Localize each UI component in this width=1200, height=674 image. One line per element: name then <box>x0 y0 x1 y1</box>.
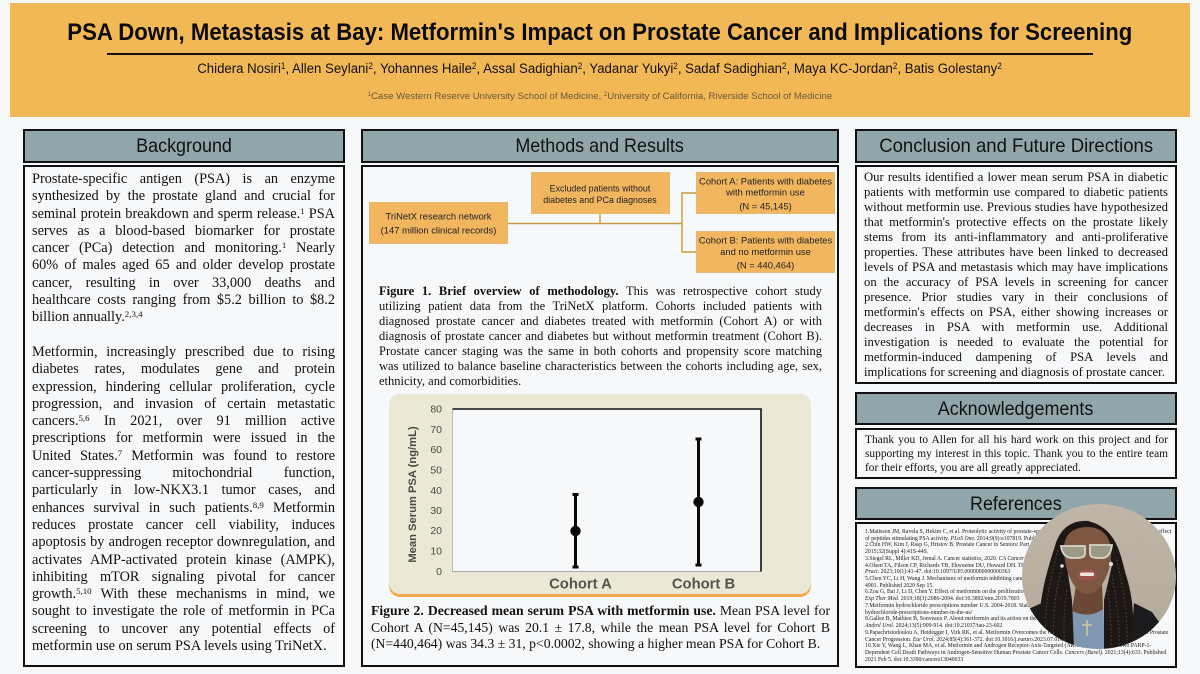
y axis ticks: 40 <box>430 485 442 497</box>
x axis labels: Cohort A <box>549 576 612 592</box>
box: exclusion: Excluded patients without <box>550 184 651 194</box>
reference list: 5.Chen YC, Li H, Wang J. Mechanisms of metformin inhibiting cancer invasion and migration. Am J Transl Res. 2020;12(9):4885- <box>865 576 1166 582</box>
y axis ticks <box>430 404 442 578</box>
box: cohort A: with metformin use <box>725 186 805 198</box>
panel: references <box>855 522 1177 668</box>
box: cohort B: (N = 440,464) <box>737 260 794 270</box>
conclusion text: decreases in PSA with metformin use. Additional <box>864 320 1168 334</box>
heading: Acknowledgements: Acknowledgements <box>938 398 1094 420</box>
reference list: Androl Urol. 2024;13(5):909-914. doi:10.21037/tau-23-602 <box>865 623 1002 629</box>
heading: References: References <box>970 493 1062 515</box>
acknowledgements text: Thank you to Allen for all his hard work on this project and for <box>865 434 1168 446</box>
y axis ticks: 80 <box>430 404 442 416</box>
reference list: 4.Olsen TA, Filson CP, Richards TB, Ekwueme DU, Howard DH. The Cost of Cancer Care Delivery. JCO Oncol <box>865 563 1125 569</box>
reference list: 2.Chin HW, Kim J, Rasp G, Hristov B. Prostate Cancer in Seniors: Part 1: Epidemiology, Pathology, and Screening. Fed Pract. <box>865 542 1158 548</box>
caption: figure 1: was utilized to balance baseline characteristics between the cohorts including age, sex, <box>379 359 822 373</box>
caption: figure 1: diagnosis of prostate cancer and diabetes but without metformin treatment (Cohort B). <box>379 329 822 343</box>
reference list <box>864 528 1172 663</box>
box: cohort A <box>696 172 834 214</box>
caption: figure 1: Figure 1. Brief overview of methodology. This was retrospective cohort study <box>379 284 822 298</box>
plot area <box>452 409 761 572</box>
paragraph: metformin overview: screening to uncover any potential effects of <box>32 621 335 637</box>
box: cohort A: Cohort A: Patients with diabetes <box>699 176 832 186</box>
heading: Conclusion and Future Directions <box>855 129 1177 163</box>
paragraph: PSA overview: serves as a blood-based biomarker for prostate <box>32 223 335 239</box>
paragraph: metformin overview: growth.5,10 With these mechanisms in mind, we <box>32 586 335 602</box>
reference list: 10.Xie Y, Wang L, Khan MA, et al. Metformin and Androgen Receptor-Axis-Targeted (ARAT) Agents Induce Two PARP-1- <box>865 643 1151 649</box>
conclusion text: patients with metformin use compared to diabetic patients <box>864 185 1168 199</box>
box: cohort A: (N = 45,145) <box>739 200 792 212</box>
y axis ticks: 70 <box>430 424 442 436</box>
necklace cross <box>1082 620 1092 636</box>
paragraph: PSA overview: cancer, resulting in over 33,000 deaths and <box>32 275 335 291</box>
affiliations: 1Case Western Reserve University School of Medicine, 2University of California, Riverside School of Medicine <box>368 91 832 102</box>
conclusion text: metformin's effects on PSA, either showing increases or <box>864 305 1168 319</box>
header banner <box>10 3 1190 117</box>
conclusion text <box>864 170 1168 379</box>
paragraph: metformin overview: prescriptions for metformin were issued in the <box>32 430 335 446</box>
conclusion text: stems from its anti-inflammatory and anti-proliferative <box>864 230 1168 244</box>
neck <box>1072 585 1103 615</box>
jacket <box>1030 603 1159 644</box>
box: cohort B: Cohort B: Patients with diabetes <box>699 234 833 246</box>
paragraph: metformin overview: enhances survival in such patients.8,9 Metformin <box>32 500 335 516</box>
paragraph: metformin overview: reduces prostate cancer cell viability, induces <box>32 517 335 533</box>
presenter portrait <box>1022 504 1176 649</box>
paragraph: PSA overview: cancer (PCa) detection and monitoring.1 Nearly <box>32 240 335 256</box>
box: TriNetX: (147 million clinical records) <box>381 224 496 236</box>
flowchart connectors <box>508 193 696 252</box>
paragraph: metformin overview: apoptosis by androgen receptor downregulation, and <box>32 534 335 550</box>
y axis title: Mean Serum PSA (ng/mL) <box>407 426 419 563</box>
paragraph: metformin overview: cancer-suppressing mitochondrial function, <box>32 465 335 481</box>
conclusion text: Our results identified a lower mean serum PSA in diabetic <box>864 170 1168 184</box>
paragraph: metformin overview: sought to investigate the role of metformin in PCa <box>32 603 335 619</box>
caption: figure 1: diagnosed prostate cancer and diabetes treated with metformin (Cohort A) or with <box>379 314 822 328</box>
reference list: 1.Mattsson JM, Ravela S, Hekim C, et al. Proteolytic activity of prostate-specific antigen (PSA) towards protein substrates and effect <box>865 529 1171 535</box>
face <box>1064 527 1111 594</box>
reference list: hydrochloride-prescriptions-number-in-the-us/ <box>865 610 972 616</box>
chart: mean serum PSA by cohort <box>389 394 811 597</box>
reference list: Pract. 2023;10(1):41-47. doi:10.1097/UPJ.0000000000000363 <box>865 569 1010 575</box>
acknowledgements text: supporting my interest in this topic. Thank you to the entire team <box>865 448 1168 460</box>
paragraph: metformin overview: diabetes rates, modulates gene and protein <box>32 361 335 377</box>
paragraph: PSA overview: seminal protein breakdown and sperm release.1 PSA <box>32 206 335 222</box>
paragraph: metformin overview: Metformin, increasingly prescribed due to rising <box>32 344 335 360</box>
reference list: 7.Metformin hydrochloride prescriptions number U.S. 2004-2018. Statista. https://www.statista.com/statistics/metformin- <box>865 603 1145 609</box>
paragraph: PSA overview: 60% of males aged 65 and older develop prostate <box>32 257 335 273</box>
caption: figure 2: (N=440,464) was 34.3 ± 31, p<0.0002, showing a higher mean PSA for Cohort B. <box>371 636 820 651</box>
reference list: of peptides stimulating PSA activity. PLoS One. 2014;9(9):e107819. Published 2014 Sep 25. <box>865 536 1078 542</box>
authors: Chidera Nosiri1, Allen Seylani2, Yohannes Haile2, Assal Sadighian2, Yadanar Yukyi2, Sadaf Sadighian2, Maya KC-Jordan2, Batis Golestany2 <box>198 61 1002 77</box>
title rule <box>107 53 1093 54</box>
paragraph: metformin overview: activates AMP-activated protein kinase (AMPK), <box>32 552 335 568</box>
box: TriNetX: TriNetX research network <box>386 210 492 222</box>
caption: figure 2: Figure 2. Decreased mean serum PSA with metformin use. Mean PSA level for <box>371 603 830 618</box>
paragraph: metformin overview: progression, and invasion of certain metastatic <box>32 396 335 412</box>
panel: background text <box>23 165 345 667</box>
earrings <box>1060 564 1064 568</box>
box: exclusion: diabetes and PCa diagnoses <box>543 195 657 205</box>
reference list: 8.Gallez B, Mathieu B, Sonveaux P. About metformin and its action on the androgen receptor in prostate cancer. Transl <box>865 616 1139 622</box>
paragraph: PSA overview: Prostate-specific antigen (PSA) is an enzyme <box>32 171 335 187</box>
y axis ticks: 50 <box>430 464 442 476</box>
paragraph: metformin overview: expression, hindering cellular proliferation, cycle <box>32 379 335 395</box>
panel: methods and results <box>361 165 839 667</box>
caption: figure 2 <box>371 603 830 651</box>
conclusion text: properties. These attributes have been linked to decreased <box>864 245 1168 259</box>
reference list: Dependent Cell Death Pathways in Androgen-Sensitive Human Prostate Cancer Cells. Cancers (Basel). 2021;13(4):633. Published <box>865 650 1166 656</box>
box: TriNetX <box>370 202 508 244</box>
braid texture <box>1046 550 1127 650</box>
box: cohort B <box>696 232 834 272</box>
conclusion text: on the accuracy of PSA levels in screening for cancer <box>864 275 1168 289</box>
hair mass <box>1040 521 1133 650</box>
box: cohort B: and no metformin use <box>720 246 811 257</box>
paragraph: PSA overview <box>32 171 335 325</box>
heading: Methods and Results <box>361 129 839 163</box>
reference list: 9.Papachristodoulou A, Heidegger I, Virk RK, et al. Metformin Overcomes the Consequences of NKX3.1 Loss to Suppress Prostate <box>865 630 1168 636</box>
reference list: 4901. Published 2020 Sep 15. <box>865 583 934 589</box>
y axis ticks: 60 <box>430 444 442 456</box>
y axis ticks: 30 <box>430 505 442 517</box>
reference list: Cancer Progression. Eur Urol. 2024;85(4):361-372. doi:10.1016/j.eururo.2023.07.016 <box>865 636 1063 642</box>
chart frame <box>389 394 811 597</box>
conclusion text: levels of PSA and metastasis which may have implications <box>864 260 1168 274</box>
box: exclusion <box>532 172 670 214</box>
heading: Background: Background <box>136 135 232 157</box>
flowchart <box>369 172 835 273</box>
caption: figure 1: Prostate cancer staging was the same in both cohorts and propensity score matching <box>379 344 822 358</box>
conclusion text: presence. Prior studies vary in their conclusions of <box>864 290 1168 304</box>
caption: figure 1 <box>379 284 822 388</box>
caption: figure 1: utilizing patient data from the TriNetX platform. Cohorts included patients with <box>379 299 822 313</box>
reference list: 6.Zou G, Bai J, Li D, Chen Y. Effect of metformin on the proliferation, apoptosis, invasion and autophagy of ovarian cancer cells. <box>865 589 1163 595</box>
paragraph: metformin overview: particularly in low-NKX3.1 tumor cases, and <box>32 482 335 498</box>
y axis ticks: 0 <box>436 566 442 578</box>
conclusion text: metformin-induced dampening of PSA levels and <box>864 350 1168 364</box>
conclusion text: investigation is needed to evaluate the potential for <box>864 335 1168 349</box>
paragraph: PSA overview: billion annually.2,3,4 <box>32 309 143 325</box>
series: cohort B <box>693 439 704 565</box>
paragraph: PSA overview: healthcare costs ranging from $5.2 billion to $8.2 <box>32 292 335 308</box>
paragraph: metformin overview <box>32 344 335 654</box>
paragraph: PSA overview: synthesized by the prostate gland and crucial for <box>32 188 335 204</box>
conclusion text: without metformin use. Previous studies have hypothesized <box>864 200 1168 214</box>
x axis labels <box>549 576 735 592</box>
heading: Methods and Results: Methods and Results <box>516 135 684 157</box>
reference list: 2015;32(Suppl 4):41S-44S. <box>865 549 928 555</box>
shirt <box>1072 609 1106 649</box>
heading: Background <box>23 129 345 163</box>
reference list: 2021 Feb 5. doi:10.3390/cancers13040633 <box>865 657 963 663</box>
acknowledgements text: for their efforts, you are all greatly appreciated. <box>865 462 1081 474</box>
reference list: 3.Siegel RL, Miller KD, Jemal A. Cancer statistics, 2020. CA Cancer J Clin. 2020;70(1):7-30. <box>865 556 1082 562</box>
acknowledgements text <box>865 434 1168 474</box>
glasses <box>1061 545 1112 558</box>
conclusion text: implications for screening and diagnosis of prostate cancer. <box>864 365 1165 379</box>
heading: References <box>855 487 1177 520</box>
heading: Acknowledgements <box>855 392 1177 425</box>
y axis ticks: 10 <box>430 546 442 558</box>
y axis ticks: 20 <box>430 525 442 537</box>
caption: figure 1: ethnicity, and comorbidities. <box>379 374 521 388</box>
series: cohort A <box>570 494 581 567</box>
paragraph: metformin overview: inhibiting mTOR signaling pivotal for cancer <box>32 569 335 585</box>
paragraph: metformin overview: United States.7 Metformin was found to restore <box>32 448 335 464</box>
paragraph: metformin overview: metformin use on serum PSA levels using TriNetX. <box>32 638 327 654</box>
heading: Conclusion and Future Directions: Conclusion and Future Directions <box>879 135 1153 157</box>
panel: conclusion <box>855 165 1177 384</box>
x axis labels: Cohort B <box>672 576 735 592</box>
mouth <box>1078 570 1096 580</box>
caption: figure 2: Cohort A (N=45,145) was 20.1 ± 17.8, while the mean PSA level for Cohort B <box>371 620 830 635</box>
paragraph: metformin overview: cancers.5,6 In 2021, over 91 million active <box>32 413 335 429</box>
title: PSA Down, Metastasis at Bay: Metformin's Impact on Prostate Cancer and Implications for Screening <box>68 19 1132 46</box>
reference list: Exp Ther Med. 2019;18(3):2086-2094. doi:10.3892/etm.2019.7803 <box>865 596 1019 602</box>
panel: acknowledgements <box>855 428 1177 479</box>
conclusion text: that metformin's protective effects on the prostate likely <box>864 215 1168 229</box>
